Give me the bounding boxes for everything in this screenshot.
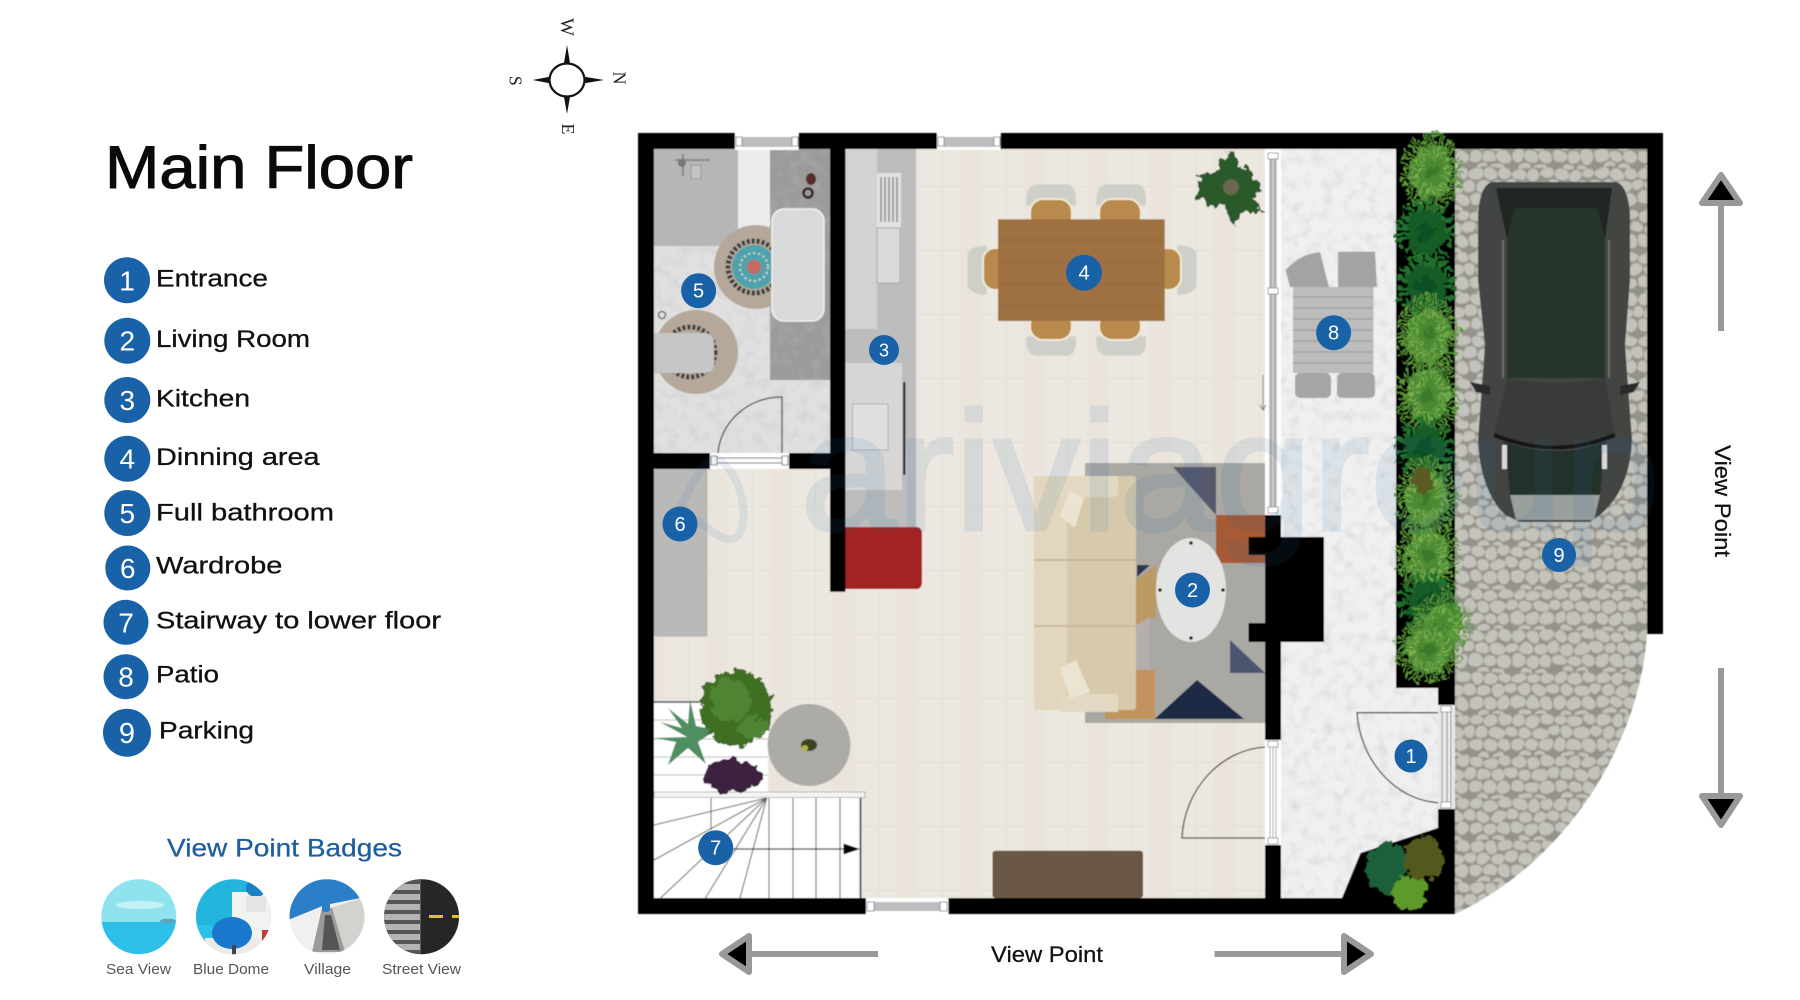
legend item 4 <box>104 436 320 482</box>
main door threshold <box>1265 740 1281 845</box>
walls <box>638 133 1663 914</box>
legend item 6 <box>105 546 282 590</box>
coffee table <box>1156 538 1226 642</box>
arrow: view point down <box>1702 668 1740 825</box>
legend item 5 <box>104 490 334 536</box>
window: top centre <box>937 133 1001 150</box>
compass: W <box>556 18 577 36</box>
legend item 5: Full bathroom <box>156 500 334 527</box>
sliding patio door <box>1260 149 1281 515</box>
legend item 8: Patio <box>156 662 219 689</box>
marker 9: 9 <box>1553 545 1565 567</box>
room 6: wardrobe <box>654 469 708 637</box>
entrance door <box>1357 705 1455 809</box>
main interior floor <box>654 149 1265 898</box>
room 5: bathroom <box>654 149 830 453</box>
fireplace and chimney <box>1248 515 1324 740</box>
arrow: view point left <box>722 936 878 972</box>
window: bottom <box>866 898 948 914</box>
stairway upper landing <box>654 702 768 792</box>
badge: street view <box>382 878 462 978</box>
brown bench <box>992 851 1143 898</box>
badge: village: Village <box>304 961 351 978</box>
legend item 8: 8 <box>118 662 134 693</box>
marker 4: 4 <box>1078 263 1090 285</box>
toilet rug <box>654 310 738 394</box>
legend item 7 <box>104 600 441 645</box>
compass: N <box>610 72 630 84</box>
arrow: view point up <box>1702 175 1740 331</box>
plan number markers <box>662 255 1576 865</box>
badge: blue dome <box>193 878 273 978</box>
sofa <box>1034 476 1136 712</box>
legend item 4: Dinning area <box>156 444 320 471</box>
legend item 3 <box>104 377 250 423</box>
floor plan <box>638 120 1670 940</box>
marker 1: 1 <box>1405 746 1417 768</box>
badge: sea view: Sea View <box>106 961 171 978</box>
badge: blue dome: Blue Dome <box>193 961 269 978</box>
room 3: kitchen <box>846 149 916 527</box>
legend item 2: 2 <box>120 326 135 357</box>
gravel driveway <box>1454 148 1648 914</box>
bath rug <box>714 225 798 309</box>
marker 6: 6 <box>674 514 686 536</box>
marker 5: 5 <box>693 281 704 303</box>
round side table <box>768 704 850 786</box>
legend item 9 <box>103 709 254 757</box>
compass <box>506 18 630 134</box>
marker 1 <box>1394 740 1428 772</box>
watermark: ariviagroup <box>800 377 1660 567</box>
living room rug <box>1085 463 1265 723</box>
bathroom door swing <box>718 397 782 453</box>
car <box>1470 182 1640 522</box>
main door swing <box>1182 747 1265 838</box>
marker 8: 8 <box>1328 323 1339 345</box>
marker 4 <box>1066 255 1102 291</box>
legend item 3: 3 <box>120 385 135 416</box>
legend item 6: 6 <box>120 553 136 584</box>
window: top left <box>735 133 799 150</box>
legend item 7: 7 <box>118 607 134 638</box>
planter group by stairs <box>654 670 772 793</box>
legend item 7: Stairway to lower floor <box>156 607 441 634</box>
room 4: dining table and chairs <box>967 184 1197 356</box>
entrance planter <box>1366 836 1444 910</box>
badge: sea view <box>100 878 178 978</box>
legend item 9: 9 <box>119 718 135 750</box>
potted plant near patio door <box>1197 151 1265 227</box>
right view point label: View Point <box>1710 445 1735 557</box>
marker 2 <box>1175 572 1210 608</box>
patio table and chairs <box>1286 252 1377 398</box>
legend item 2: Living Room <box>156 326 310 353</box>
title: Main Floor <box>105 134 413 201</box>
red armchair <box>846 527 922 589</box>
view point badges heading: View Point Badges <box>167 835 402 863</box>
marker 8 <box>1316 315 1351 350</box>
legend item 8 <box>104 654 219 699</box>
marker 5 <box>681 273 716 308</box>
marker 7 <box>698 830 733 865</box>
legend item 1: 1 <box>119 266 135 296</box>
legend item 6: Wardrobe <box>156 552 282 579</box>
compass: E <box>558 124 578 134</box>
legend item 3: Kitchen <box>156 386 250 413</box>
stairs <box>654 792 865 898</box>
stove <box>877 173 901 228</box>
hedge plants <box>1400 140 1467 678</box>
legend item 9: Parking <box>159 717 254 744</box>
marker 9 <box>1542 538 1576 572</box>
marker 7: 7 <box>710 838 721 860</box>
badge: village <box>288 878 366 978</box>
sink basin <box>772 209 824 321</box>
patio and entrance floor <box>1281 149 1438 898</box>
legend item 2 <box>104 318 310 364</box>
bathroom door threshold <box>710 453 789 469</box>
marker 6 <box>662 506 698 542</box>
legend item 5: 5 <box>120 498 135 529</box>
arrow: view point right <box>1214 936 1371 972</box>
bottom view point label: View Point <box>991 942 1103 967</box>
legend item 4: 4 <box>120 444 135 475</box>
badge: street view: Street View <box>382 961 461 978</box>
legend item 1: Entrance <box>156 266 268 293</box>
marker 2: 2 <box>1187 580 1198 602</box>
marker 3: 3 <box>879 340 889 360</box>
legend item 1 <box>104 257 268 303</box>
legend <box>103 257 441 757</box>
compass: S <box>506 76 526 86</box>
marker 3 <box>869 335 899 365</box>
